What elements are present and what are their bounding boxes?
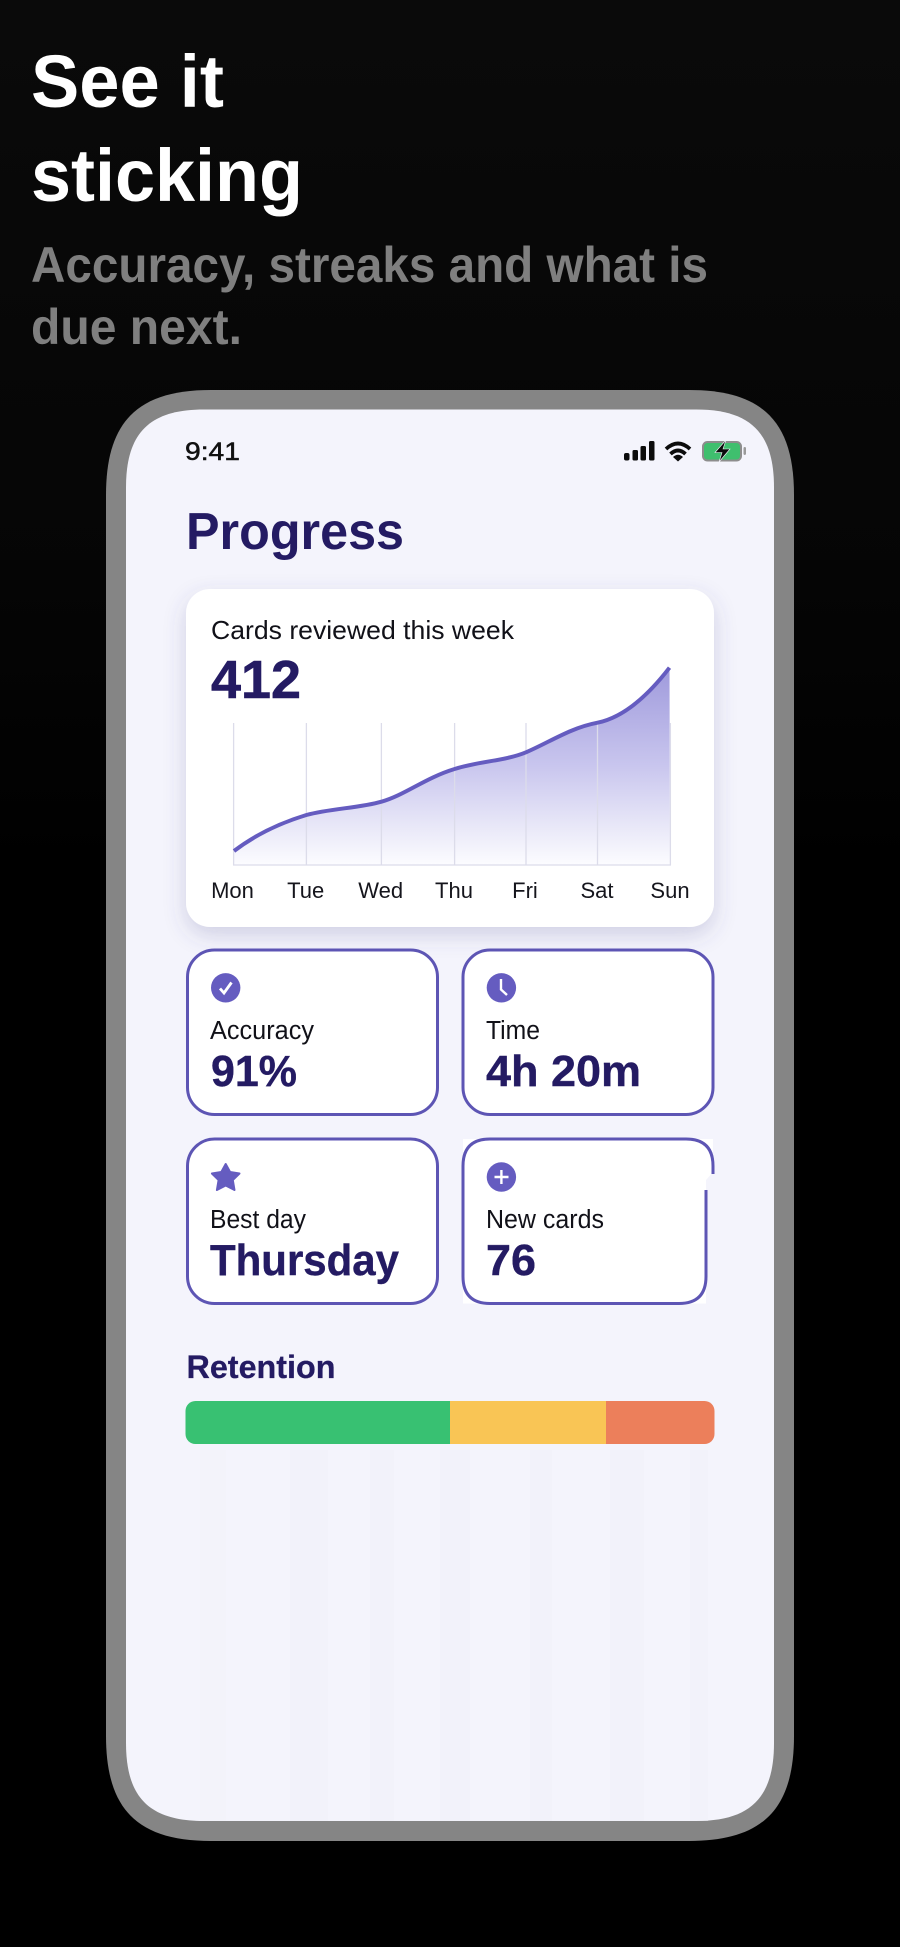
x-axis day labels: Sun [650,878,690,903]
phone frame [106,390,794,1841]
new cards value: 76 [486,1236,536,1285]
subtitle: Accuracy, streaks and what is [31,237,708,293]
panel: best day [188,1139,438,1304]
best day label: Best day [210,1206,306,1234]
x-axis day labels: Mon [211,878,254,903]
icon: check [211,973,240,1002]
x-axis day labels: Thu [435,878,473,903]
icon: battery [703,440,746,462]
title: sticking [31,134,303,217]
panel: time [463,950,713,1114]
icon: wifi [666,444,690,462]
time label: Time [486,1017,540,1045]
accuracy label: Accuracy [210,1017,314,1045]
status bar time: 9:41 [185,438,240,466]
time value: 4h 20m [486,1047,641,1096]
new cards label: New cards [486,1206,604,1234]
card label: Cards reviewed this week [211,615,515,645]
title: See it [31,40,224,123]
x-axis day labels: Tue [287,878,324,903]
accuracy value: 91% [211,1047,297,1096]
x-axis day labels: Wed [358,878,403,903]
icon: star [212,1164,240,1190]
icon: signal bars [624,441,654,460]
x-axis day labels: Sat [580,878,614,903]
x-axis day labels [211,878,690,903]
total number: 412 [211,650,301,710]
retention bar [186,1401,715,1444]
subtitle: due next. [31,299,242,355]
icon: clock [487,973,516,1002]
best day value: Thursday [210,1236,400,1285]
screen heading: Progress [186,503,404,561]
area chart [233,668,671,865]
panel: accuracy [188,950,438,1114]
x-axis day labels: Fri [512,878,538,903]
icon: plus [487,1162,516,1192]
title [31,40,303,217]
subtitle [31,237,708,355]
panel: cards reviewed this week [186,589,714,927]
retention heading: Retention [186,1349,336,1385]
panel: new cards [463,1139,713,1304]
